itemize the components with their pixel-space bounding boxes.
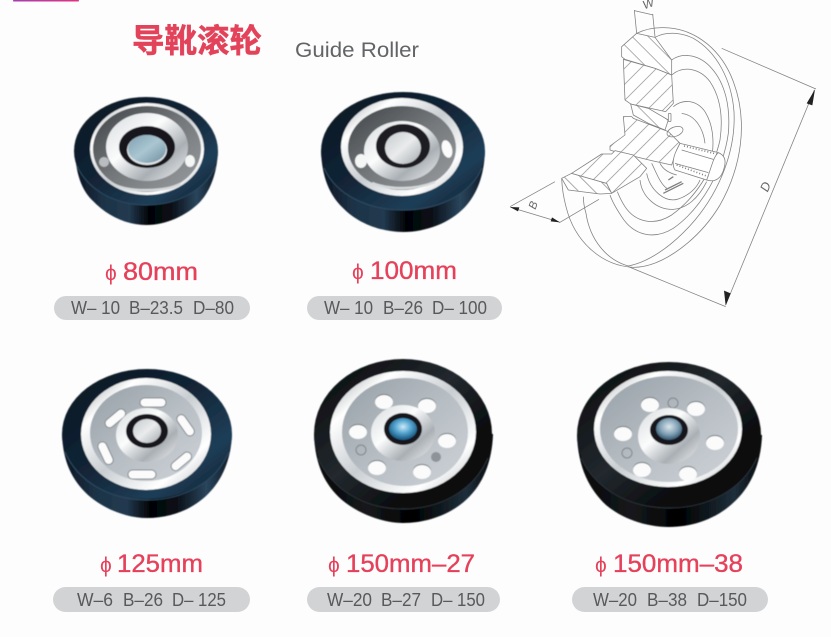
title: 导靴滚轮 (132, 15, 262, 62)
label 100mm: ϕ (352, 261, 364, 284)
spec pill 80mm: W– 10 (71, 298, 120, 318)
dimension B: B (527, 199, 541, 211)
spec pill 150mm-27 (307, 587, 500, 612)
threaded bolt (673, 143, 725, 181)
section: upper bearing (631, 104, 668, 130)
label 150mm-38: ϕ (595, 554, 607, 577)
spec pill 80mm: B–23.5 (129, 298, 183, 318)
dimension D (628, 48, 816, 307)
roller 150mm-38 (577, 362, 762, 527)
roller 80mm (74, 97, 218, 225)
spec pill 125mm: W–6 (77, 590, 113, 610)
top accent bar (13, 0, 79, 2)
technical diagram: roller cross-section (510, 0, 816, 307)
spec pill 150mm-27: B–27 (381, 590, 421, 610)
spec pill 80mm: D–80 (193, 298, 234, 318)
spec pill 100mm: D– 100 (432, 298, 487, 318)
spec pill 80mm (54, 296, 250, 320)
roller 100mm (321, 92, 485, 232)
section: upper tyre (622, 33, 672, 75)
spec pill 150mm-38: B–38 (647, 590, 687, 610)
roller 150mm-27 (314, 359, 493, 523)
spec pill 125mm: D– 125 (172, 590, 226, 610)
spec pill 100mm: W– 10 (324, 298, 373, 318)
spec pill 150mm-27: W–20 (327, 590, 372, 610)
outer wheel outlines (562, 28, 741, 267)
label 150mm-27: 150mm–27 (346, 550, 475, 578)
roller 125mm (62, 369, 232, 518)
section: lower tyre (562, 173, 612, 194)
spec pill 100mm: B–26 (383, 298, 423, 318)
dimension D: D (758, 180, 774, 194)
spec pill 150mm-38: W–20 (593, 590, 637, 610)
subtitle: Guide Roller (295, 39, 419, 62)
dimension B (510, 182, 599, 223)
spec pill 150mm-38 (572, 587, 768, 612)
label 80mm: 80mm (123, 258, 198, 286)
spec pill 125mm: B–26 (123, 590, 163, 610)
spec pill 150mm-38: D–150 (697, 590, 747, 610)
section: shaft (610, 117, 680, 165)
label 80mm: ϕ (105, 262, 117, 285)
label 125mm: 125mm (117, 550, 203, 578)
section: lower hub (572, 151, 647, 193)
bearing detail (652, 113, 684, 193)
section: upper hub (623, 59, 673, 112)
label 125mm: ϕ (100, 554, 112, 577)
label 150mm-38: 150mm–38 (613, 550, 743, 578)
label 100mm: 100mm (370, 257, 457, 285)
dimension W (634, 0, 658, 37)
spec pill 100mm (307, 296, 502, 320)
spec pill 150mm-27: D– 150 (431, 590, 485, 610)
label 150mm-27: ϕ (328, 554, 340, 577)
spec pill 125mm (53, 587, 250, 612)
